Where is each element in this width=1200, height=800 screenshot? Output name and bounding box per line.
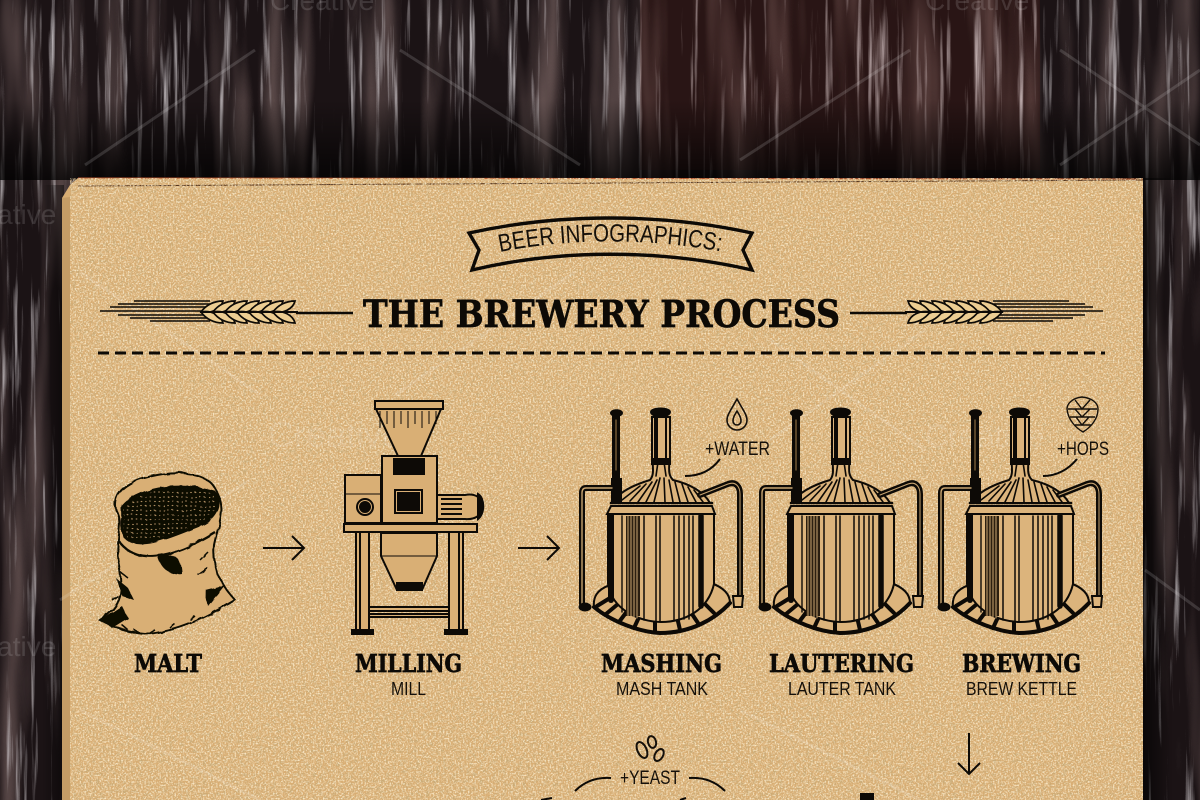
label: milling: MILLING xyxy=(355,649,462,678)
paper sheet xyxy=(62,178,1143,800)
icon: wheat right xyxy=(850,301,1103,323)
callout: yeast: +YEAST xyxy=(620,768,680,789)
next tank top xyxy=(860,793,874,800)
label: milling: MILL xyxy=(391,679,426,699)
callout: water xyxy=(685,439,770,476)
icon: wheat left xyxy=(100,301,353,323)
label: mashing: MASH TANK xyxy=(616,679,708,699)
arrow: milling to mashing xyxy=(518,536,559,560)
label: brewing xyxy=(962,649,1081,699)
label: mashing: MASHING xyxy=(601,649,722,678)
arrow: malt to milling xyxy=(263,536,304,560)
watermark text xyxy=(0,0,1044,662)
label: brewing: BREW KETTLE xyxy=(966,679,1077,699)
label: lautering: LAUTERING xyxy=(769,649,914,678)
icon: mash tank xyxy=(578,408,743,633)
icon: hops xyxy=(1067,397,1098,432)
banner: beer infographics: BEER INFOGRAPHICS: xyxy=(498,224,722,252)
icon: lauter tank xyxy=(758,408,923,633)
watermark text: Creative xyxy=(268,414,402,455)
arrow: brewing down xyxy=(958,733,980,774)
label: lautering: LAUTER TANK xyxy=(788,679,896,699)
icon: mill machine xyxy=(344,401,483,634)
icon: brew kettle xyxy=(938,408,1102,633)
title: THE BREWERY PROCESS xyxy=(363,292,840,336)
callout: hops: +HOPS xyxy=(1057,439,1109,460)
icon: malt sack xyxy=(100,473,235,634)
label: brewing: BREWING xyxy=(962,649,1081,678)
callout: yeast xyxy=(541,768,725,800)
dashed divider xyxy=(98,352,1105,354)
icon: yeast xyxy=(634,735,666,763)
label: mashing xyxy=(601,649,722,699)
label: lautering xyxy=(769,649,914,699)
icon: water drop xyxy=(727,399,747,430)
banner: beer infographics xyxy=(466,216,755,272)
callout: water: +WATER xyxy=(705,439,770,460)
label: milling xyxy=(355,649,462,699)
callout: hops xyxy=(1043,439,1109,476)
watermark text: Creative xyxy=(925,418,1044,454)
label: malt: MALT xyxy=(134,649,202,678)
